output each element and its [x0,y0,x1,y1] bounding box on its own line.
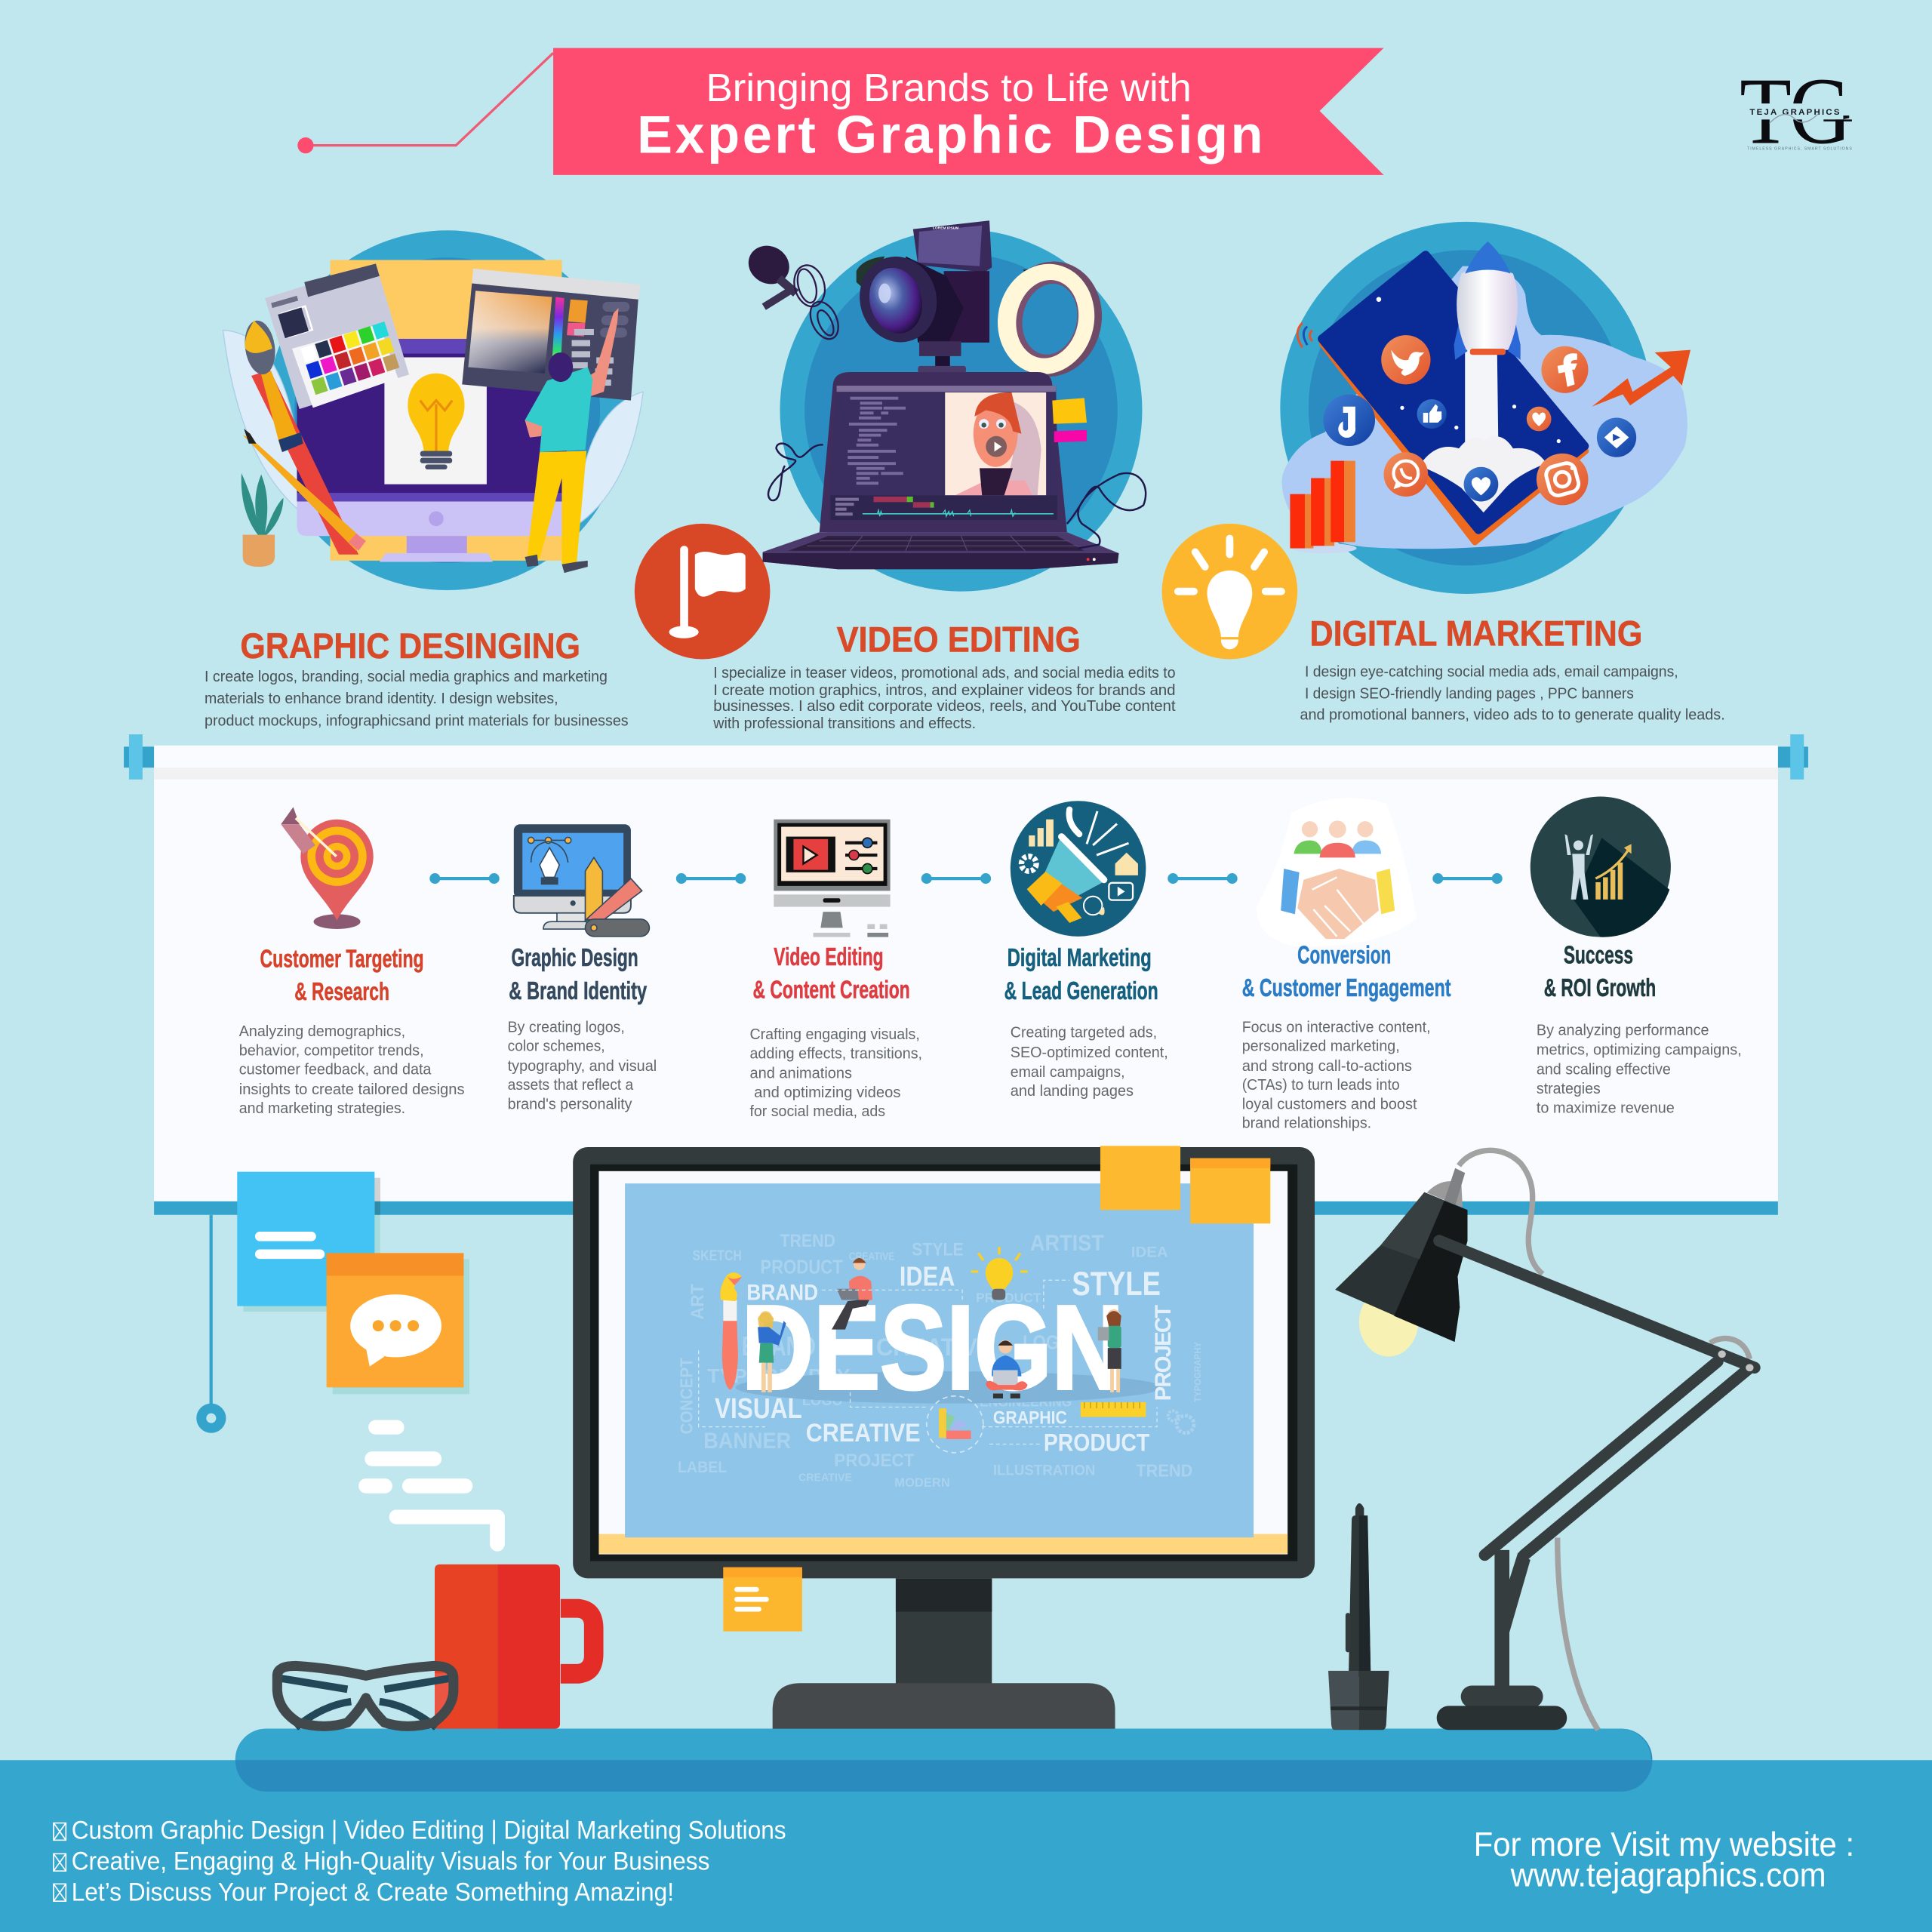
section text: video editing: I create motion graphics, intros, and explainer videos for brands and [713,681,1176,699]
step 1: customer targeting [239,807,465,1117]
colour picker panel [462,269,641,401]
icon: success chart [1531,797,1671,937]
step title: & Lead Generation [1004,977,1158,1005]
title banner [297,48,1383,175]
step text: color schemes, [508,1038,605,1055]
backdrop circle [1280,222,1652,594]
step title: & ROI Growth [1544,974,1656,1002]
step text [1011,1024,1168,1100]
section text: video editing [712,664,1176,732]
steam lines [358,1420,505,1552]
faint word cloud: SKETCH [693,1247,742,1264]
camera [851,220,992,374]
title line 2: Expert Graphic Design [637,104,1263,164]
step title [1544,942,1656,1002]
step text: metrics, optimizing campaigns, [1537,1041,1742,1059]
section text: graphic designing: materials to enhance brand identity. I design websites, [205,690,558,707]
illustration: digital marketing [1280,222,1690,594]
code lines [848,397,906,485]
bright keywords: BRAND [746,1280,818,1305]
lamp post [1494,1550,1509,1688]
left roller cap [124,734,154,780]
step text: to maximize revenue [1537,1099,1675,1116]
ground shadow [736,1371,1162,1404]
faint word cloud: PRODUCT [760,1255,843,1278]
bright keywords: PRODUCT [1044,1428,1149,1456]
logo: G [1789,59,1852,164]
step text: By analyzing performance [1537,1021,1709,1038]
footer band [0,1760,1932,1932]
step text: typography, and visual [508,1057,657,1075]
section text: digital marketing: I design eye-catching social media ads, email campaigns, [1305,663,1678,680]
step 2: graphic design [508,824,657,1112]
step connectors [431,875,1501,882]
twitter [1381,335,1431,384]
section text: video editing: I specialize in teaser videos, promotional ads, and social media edits to [713,664,1176,681]
small sticky note [723,1567,802,1632]
rocket [1420,242,1546,512]
man with laptop [832,1258,872,1330]
missing-glyph boxes [54,1823,66,1901]
footer bullet list: Let’s Discuss Your Project & Create Something Amazing! [72,1878,674,1906]
footer bullet list: Creative, Engaging & High-Quality Visuals for Your Business [72,1847,709,1876]
step text: and landing pages [1011,1082,1134,1100]
step title: & Brand Identity [509,977,647,1005]
laptop [763,372,1118,569]
paint brush [720,1272,742,1390]
step text: customer feedback, and data [239,1061,432,1078]
step text: brand's personality [508,1095,632,1112]
step title: & Research [294,978,389,1006]
logo: TIMELESS GRAPHICS, SMART SOLUTIONS [1747,146,1852,151]
illustration: video editing [741,220,1146,592]
camera: LOREM IPSUM [933,226,958,231]
cables [768,444,1146,549]
instagram [1537,454,1588,505]
bright keywords: VISUAL [715,1392,802,1424]
step text: and strong call-to-actions [1242,1057,1412,1075]
step text: Crafting engaging visuals, [749,1026,920,1043]
faint word cloud: TYPOGRAPHY [1192,1342,1203,1402]
growth arrow [1592,350,1690,407]
faint word cloud: ILLUSTRATION [993,1462,1095,1478]
faint word cloud: LOGO [1023,1331,1072,1354]
light blue blob [1282,266,1687,549]
sticky note: orange chat [327,1253,469,1394]
glasses [277,1666,456,1727]
faint word cloud: BRAND [742,1331,816,1361]
woman in blue [758,1311,786,1392]
step text: assets that reflect a [508,1076,634,1094]
faint word cloud [677,1231,1203,1490]
facebook [1541,346,1588,393]
microphone [741,238,844,343]
step title [753,943,910,1004]
step title: & Content Creation [753,976,910,1004]
step text: Analyzing demographics, [239,1023,405,1040]
coffee mug [435,1564,604,1729]
icon: target pin [281,807,374,929]
section text: graphic designing [205,668,629,730]
step text: email campaigns, [1011,1063,1125,1081]
step title [509,944,647,1005]
section text: video editing: businesses. I also edit corporate videos, reels, and YouTube content [713,697,1176,715]
website call to action [1474,1826,1854,1894]
step 3: video editing [749,820,922,1120]
plant [242,473,284,567]
heart orange [1527,407,1552,431]
step text [1537,1021,1742,1116]
timeline [830,495,1057,520]
video preview [945,392,1046,495]
step text: Focus on interactive content, [1242,1018,1431,1035]
wifi symbol [1297,323,1312,347]
bright keywords: PROJECT [1151,1305,1176,1401]
desktop monitor [573,1146,1315,1729]
step text: behavior, competitor trends, [239,1041,424,1059]
faint word cloud: CREATIVE [798,1472,852,1484]
paper [331,260,561,561]
step text: strategies [1537,1080,1601,1097]
bright keywords: IDEA [900,1261,955,1292]
step text [239,1023,465,1117]
bright keywords [715,1261,1176,1456]
bright keywords: CREATIVE [806,1419,921,1447]
website call to action: www.tejagraphics.com [1510,1857,1826,1894]
sticky tabs [1052,398,1087,442]
design poster [625,1183,1254,1537]
desk [235,1729,1652,1792]
section text: graphic designing: product mockups, infographicsand print materials for businesses [205,712,629,730]
light bulb [971,1247,1028,1300]
stand [896,1578,992,1689]
faint word cloud: STYLE [912,1240,964,1260]
step title: Digital Marketing [1008,944,1152,972]
taped notes [1100,1146,1270,1223]
step text: (CTAs) to turn leads into [1242,1076,1400,1094]
lamp arm brace [1509,1552,1531,1632]
step text [749,1026,922,1120]
bright keywords: GRAPHIC [993,1408,1067,1429]
step text: brand relationships. [1242,1115,1371,1132]
faint word cloud: ENGINEERING [980,1395,1072,1410]
tiktok [1323,394,1375,446]
palette panel [265,263,409,409]
woman in green [1098,1309,1121,1392]
lamp arms [1439,1241,1755,1555]
social icons [1323,335,1636,505]
sticky note: blue [237,1172,380,1312]
lamp base [1437,1685,1567,1730]
step title [1242,942,1451,1002]
backdrop circle [780,229,1142,592]
step text: and scaling effective [1537,1061,1671,1078]
step text: and animations [749,1065,852,1082]
logo: T [1740,59,1792,164]
DESIGN word: DESIGN [742,1281,1124,1414]
step text: SEO-optimized content, [1011,1044,1168,1061]
ribbon [553,48,1383,175]
step text: and optimizing videos [754,1084,900,1101]
section text: video editing: with professional transitions and effects. [712,715,976,732]
keyboard base [763,532,1118,569]
section heading: graphic designing: GRAPHIC DESINGING [240,626,580,666]
like [1417,399,1447,429]
right roller cap [1778,734,1808,780]
pencil [243,429,366,551]
colour fan [927,1396,983,1453]
faint word cloud: IDEA [1131,1244,1168,1260]
whiteboard panel [124,734,1808,1215]
section text: digital marketing [1300,663,1725,723]
lamp socket [1427,1168,1465,1210]
footer bullet list: Custom Graphic Design | Video Editing | Digital Marketing Solutions [72,1817,786,1845]
icon: video monitor [774,820,891,937]
flag badge [635,524,770,659]
brush [242,318,358,555]
faint word cloud: PRODUCT [976,1291,1041,1306]
step title [260,946,424,1006]
step text: Creating targeted ads, [1011,1024,1157,1041]
step text [508,1018,657,1112]
step text [1242,1018,1431,1132]
step text: for social media, ads [749,1103,885,1120]
colour swatches [300,321,399,395]
section text: digital marketing: and promotional banners, video ads to to generate quality leads. [1300,706,1725,723]
step text: personalized marketing, [1242,1038,1400,1055]
illustration: graphic designing [223,230,643,590]
step 4: digital marketing [1004,801,1168,1100]
faint word cloud: ART [688,1284,708,1320]
gears [1168,1411,1194,1433]
dashed connectors [699,1280,1157,1444]
man with laptop sitting [986,1340,1028,1398]
lamp bulb [1359,1287,1418,1357]
bulb badge [1162,524,1297,659]
step title: Graphic Design [512,944,638,972]
faint word cloud: PROJECT [834,1451,914,1471]
step text: loyal customers and boost [1242,1095,1417,1112]
icon: handshake [1257,798,1417,946]
step title: Conversion [1297,942,1391,970]
step title: & Customer Engagement [1242,974,1451,1002]
bright keywords: STYLE [1072,1266,1161,1303]
heart blue [1464,467,1498,501]
frame [573,1147,1315,1578]
section text: graphic designing: I create logos, branding, social media graphics and marketing [205,668,608,685]
bulb icon [408,374,465,469]
step text: and marketing strategies. [239,1100,405,1117]
title line 1: Bringing Brands to Life with [706,66,1192,110]
step text: adding effects, transitions, [749,1044,922,1062]
website call to action: For more Visit my website : [1474,1826,1854,1863]
faint word cloud: MODERN [894,1476,950,1490]
footer bullet list [54,1817,786,1906]
base [773,1683,1115,1729]
step text: insights to create tailored designs [239,1081,465,1098]
phone [1322,255,1586,542]
step title [1004,944,1158,1005]
step text: By creating logos, [508,1018,625,1035]
backdrop circle [267,230,627,590]
section heading: digital marketing: DIGITAL MARKETING [1310,614,1642,654]
designer figure [525,308,619,573]
monitor [297,339,567,561]
faint word cloud: LOGO [802,1392,843,1409]
step title: Customer Targeting [260,946,424,974]
lamp cords [1459,1150,1749,1730]
step 6: success [1531,797,1742,1116]
ring light [988,252,1112,386]
pale leaves [223,331,643,536]
faint word cloud: LABEL [678,1459,727,1476]
pen holder [1328,1503,1389,1730]
logo [1740,59,1852,164]
faint word cloud: TREND [1136,1461,1192,1481]
faint word cloud: CREATIVE [876,1333,993,1361]
icon: design monitor [514,824,649,937]
lamp shade [1335,1192,1467,1342]
section heading: video editing: VIDEO EDITING [837,620,1081,660]
faint word cloud: CREATIVE [849,1251,894,1263]
faint word cloud: ARTIST [1030,1231,1104,1256]
logo: TEJA GRAPHICS [1749,108,1840,117]
section text: digital marketing: I design SEO-friendly landing pages , PPC banners [1305,685,1634,703]
youtube [1597,417,1636,457]
faint word cloud: VISUAL [861,1391,909,1404]
faint word cloud: TREND [780,1231,835,1251]
hanging marker [196,1215,226,1433]
bar chart [1290,461,1357,553]
connector line [297,53,553,153]
step title: Video Editing [774,943,884,971]
faint word cloud: BANNER [703,1429,791,1454]
step title: Success [1564,942,1633,970]
faint word cloud: TYPOGRAPHY [707,1364,851,1387]
desk lamp [1335,1150,1755,1730]
step 5: conversion [1242,798,1451,1132]
faint word cloud: CONCEPT [677,1358,697,1434]
whatsapp [1383,452,1428,497]
lamp joints [1718,1350,1754,1371]
ruler [1081,1402,1146,1417]
icon: megaphone [1011,801,1146,937]
